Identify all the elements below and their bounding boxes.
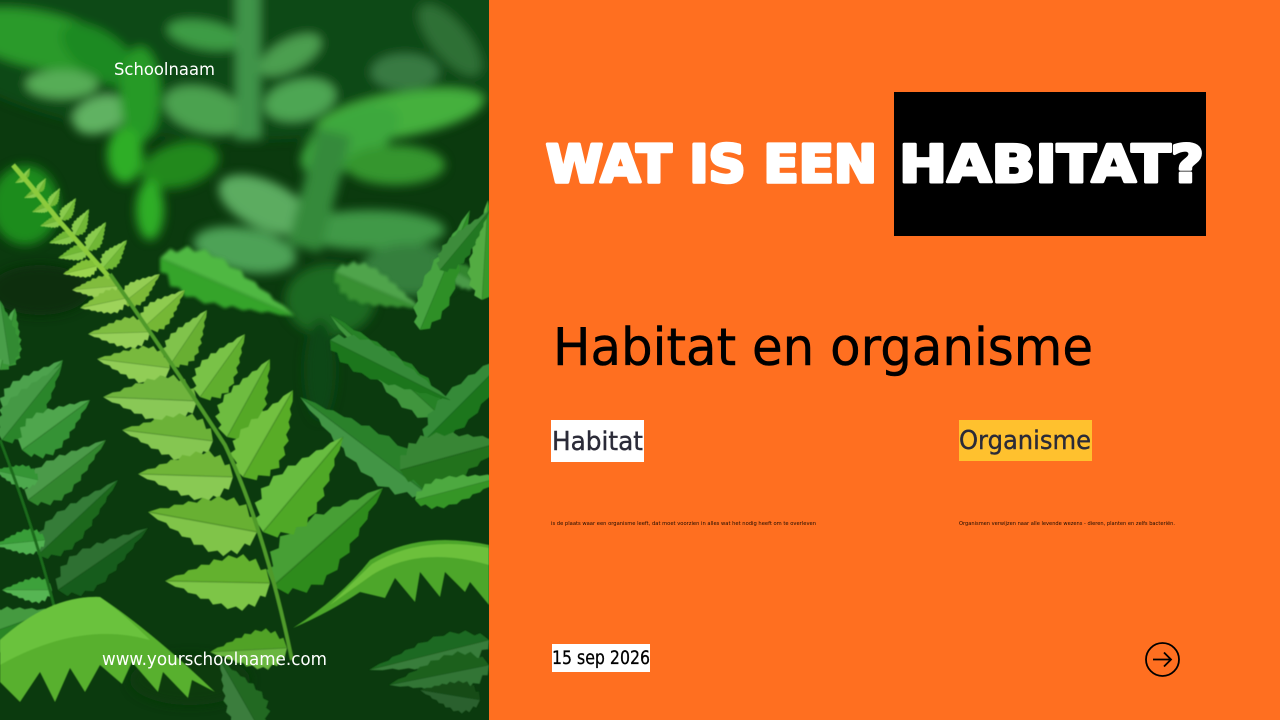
- main fern frond: [13, 165, 405, 673]
- leaflets left: [62, 258, 98, 278]
- bottom right leaf: [220, 630, 489, 720]
- label: organisme: [959, 420, 1092, 461]
- date: [552, 644, 650, 672]
- photo: fern leaves: [0, 0, 489, 720]
- icon: arrow in circle: [1146, 643, 1179, 676]
- fern fronds on the right: [0, 199, 538, 702]
- date: 15 sep 2026: [552, 647, 650, 669]
- title line one: WAT IS EEN: [546, 135, 877, 195]
- label: organisme: Organisme: [959, 426, 1091, 456]
- text: website: www.yourschoolname.com: [102, 650, 327, 670]
- label: habitat: Habitat: [552, 427, 643, 457]
- label: habitat: [551, 420, 644, 462]
- title box: [894, 92, 1206, 236]
- leaflets right: [123, 274, 160, 308]
- blurred background foliage: [0, 0, 489, 408]
- text: habitat description: is de plaats waar een organisme leeft, dat moet voorzien in alles wat het nodig heeft om te overleven: [551, 521, 816, 527]
- frond on the left: [0, 300, 148, 652]
- title line two: HABITAT?: [899, 135, 1204, 195]
- top tip: [15, 177, 24, 184]
- title: [546, 92, 1206, 236]
- frond at bottom left: [0, 597, 215, 702]
- frond at bottom right: [293, 540, 489, 628]
- text: school name: Schoolnaam: [114, 60, 215, 79]
- text: organisme description: Organismen verwijzen naar alle levende wezens - dieren, planten en zelfs bacteriën.: [959, 521, 1175, 527]
- fern leaf mid-right: [158, 244, 474, 318]
- heading: Habitat en organisme: [553, 318, 1093, 378]
